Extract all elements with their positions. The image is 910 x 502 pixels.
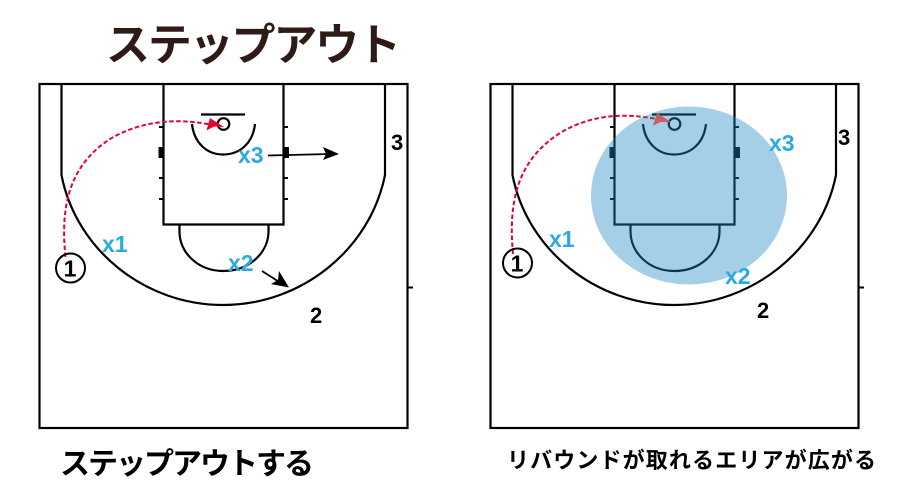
arrowhead: drive bbox=[206, 118, 224, 130]
title: ステップアウト bbox=[106, 21, 401, 70]
label x3 left: x3 bbox=[238, 142, 264, 168]
player 1 right bbox=[503, 248, 532, 278]
label 2 right: 2 bbox=[757, 298, 769, 323]
arrow: x3 moves out bbox=[268, 147, 339, 160]
court lines left bbox=[40, 84, 413, 428]
player 1 left: 1 bbox=[64, 256, 77, 282]
label 3 right: 3 bbox=[838, 125, 850, 150]
label x1 right: x1 bbox=[549, 226, 575, 252]
player 1 right: 1 bbox=[511, 250, 524, 276]
panel: right court bbox=[490, 84, 864, 428]
label x3 right: x3 bbox=[769, 130, 795, 156]
dribble path left bbox=[64, 121, 212, 257]
panel: left court bbox=[40, 84, 413, 428]
label x2 left: x2 bbox=[228, 250, 254, 276]
rebound area bbox=[591, 106, 787, 284]
label 2 left: 2 bbox=[310, 303, 322, 328]
dribble path right bbox=[512, 116, 657, 254]
label x2 right: x2 bbox=[725, 263, 751, 289]
court lines right bbox=[490, 84, 864, 428]
player 1 left bbox=[56, 254, 85, 282]
label 3 left: 3 bbox=[391, 130, 403, 155]
caption right: リバウンドが取れるエリアが広がる bbox=[507, 448, 876, 473]
caption left: ステップアウトする bbox=[60, 448, 314, 481]
label x1 left: x1 bbox=[102, 231, 128, 257]
arrow: x2 moves out bbox=[262, 271, 289, 288]
arrowhead: drive right bbox=[653, 113, 671, 126]
